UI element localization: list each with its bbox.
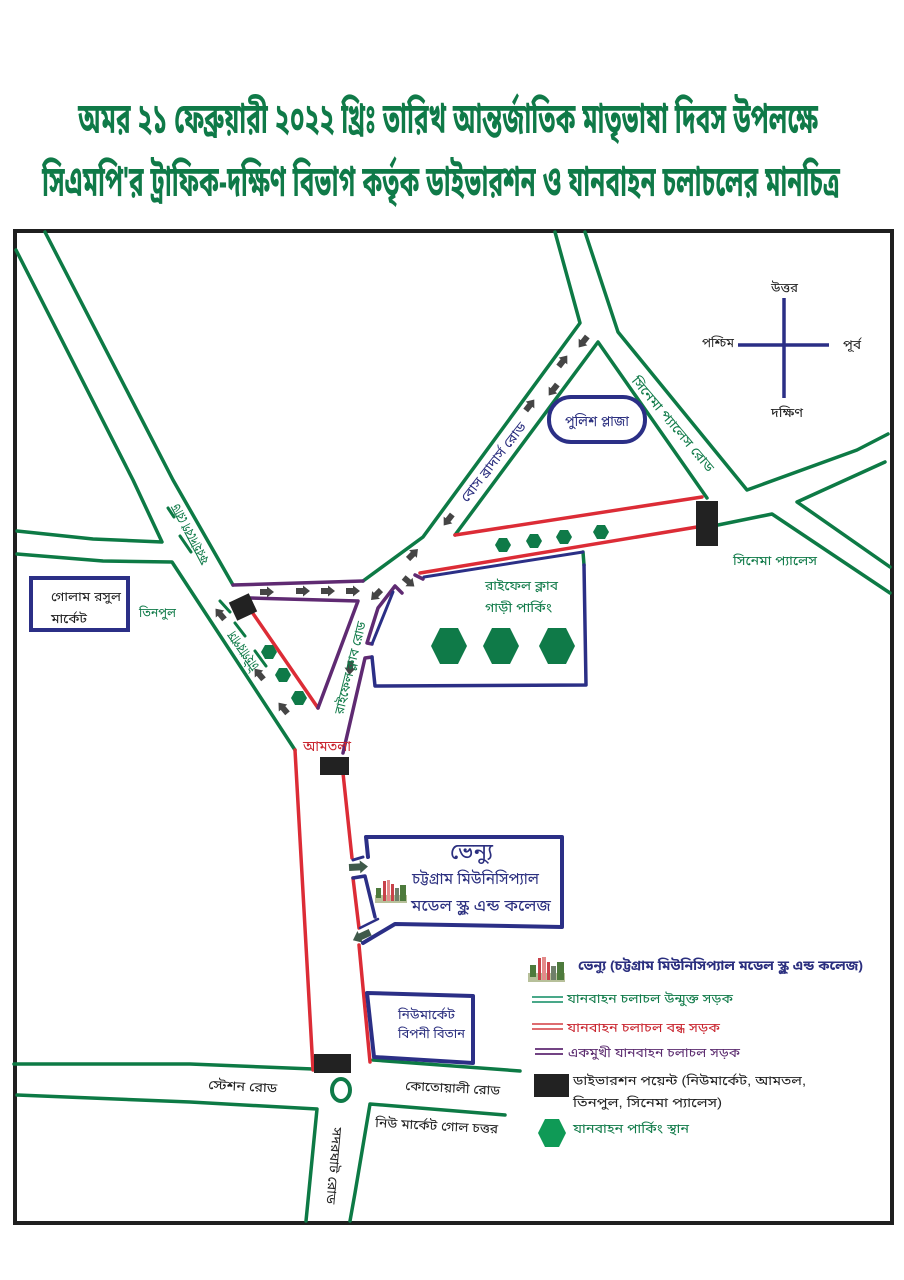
- legend: open road: যানবাহন চলাচল উন্মুক্ত সড়ক: [566, 991, 734, 1007]
- roads closed to traffic: [252, 497, 702, 1070]
- compass: [702, 280, 862, 420]
- diversion point: Tinpul: [229, 593, 257, 621]
- road labels: ফরহাদবেগ রোড: [167, 501, 214, 568]
- panel: venue box: মডেল স্কুল এন্ড কলেজ: [410, 898, 551, 915]
- panel: venue box: ভেন্যু: [450, 839, 494, 865]
- road labels: সদরঘাট রোড: [323, 1126, 345, 1206]
- panel: Police Plaza: [549, 397, 645, 442]
- road labels: কোতোয়ালী রোড: [405, 1078, 501, 1098]
- parking hexagons: Cinema Palace road: [495, 525, 609, 552]
- icon: venue legend: [528, 957, 565, 982]
- panel: Golam Rasul market box: মার্কেট: [50, 611, 88, 626]
- road labels: নিউ মার্কেট গোল চত্তর: [374, 1115, 499, 1136]
- road labels: সিনেমা প্যালেস রোড: [628, 372, 718, 475]
- road labels: স্টেশন রোড: [208, 1077, 278, 1096]
- legend: one-way road: একমুখী যানবাহন চলাচল সড়ক: [568, 1045, 741, 1061]
- compass: পশ্চিম: [702, 335, 735, 350]
- legend: closed road: যানবাহন চলাচল বন্ধ সড়ক: [566, 1020, 721, 1035]
- road labels: [167, 372, 718, 1206]
- road labels: বোস ব্রাদার্স রোড: [458, 419, 530, 505]
- place labels: আমতলা: [302, 738, 351, 754]
- diversion point: Newmarket: [314, 1054, 351, 1073]
- parking hexagons: Rifle Club: [431, 628, 575, 664]
- place labels: গাড়ী পার্কিং: [485, 600, 552, 615]
- map frame: [15, 231, 892, 1223]
- one-way roads: [233, 575, 423, 753]
- parking hexagons: Tinpul: [261, 645, 307, 705]
- panel: venue box: [353, 837, 562, 943]
- place labels: তিনপুল: [138, 605, 176, 621]
- compass: দক্ষিণ: [770, 405, 804, 420]
- road labels: রাইফেল ক্লাব রোড: [331, 619, 369, 717]
- traffic arrows: [211, 333, 592, 946]
- legend: ভেন্যু (চট্টগ্রাম মিউনিসিপ্যাল মডেল স্কুল এন্ড কলেজ): [578, 958, 863, 975]
- diversion point: Amtala: [320, 757, 349, 775]
- parking enclosure outline: [372, 552, 586, 686]
- panel: Golam Rasul market box: [31, 578, 128, 630]
- legend: diversion point: [534, 1073, 806, 1111]
- legend: [528, 957, 863, 1147]
- panel: Newmarket box: নিউমার্কেট: [397, 1007, 456, 1022]
- traffic circle: [332, 1079, 350, 1101]
- diversion point: Cinema Palace: [696, 501, 718, 546]
- icon: school building: [375, 880, 407, 903]
- panel: Golam Rasul market box: গোলাম রসুল: [51, 589, 122, 605]
- roads open to traffic: [14, 232, 890, 1221]
- legend: diversion point: তিনপুল, সিনেমা প্যালেস): [572, 1095, 722, 1111]
- legend: parking: যানবাহন পার্কিং স্থান: [572, 1121, 689, 1136]
- panel: Police Plaza: পুলিশ প্লাজা: [565, 413, 629, 430]
- panel: venue box: চট্টগ্রাম মিউনিসিপ্যাল: [411, 869, 539, 888]
- road labels: টাইগারপাস: [224, 627, 264, 674]
- place labels: [138, 553, 818, 754]
- compass: পূর্ব: [843, 337, 862, 353]
- legend: diversion point: ডাইভারশন পয়েন্ট (নিউমার্কেট, আমতল,: [572, 1073, 806, 1088]
- compass: উত্তর: [770, 280, 798, 295]
- panel: Newmarket box: বিপনী বিতান: [397, 1026, 465, 1041]
- place labels: রাইফেল ক্লাব: [484, 578, 558, 593]
- small road ticks: [168, 508, 266, 666]
- legend: parking: [538, 1119, 689, 1147]
- panel: Newmarket box: [367, 993, 473, 1063]
- title: [41, 93, 841, 208]
- place labels: সিনেমা প্যালেস: [732, 553, 818, 568]
